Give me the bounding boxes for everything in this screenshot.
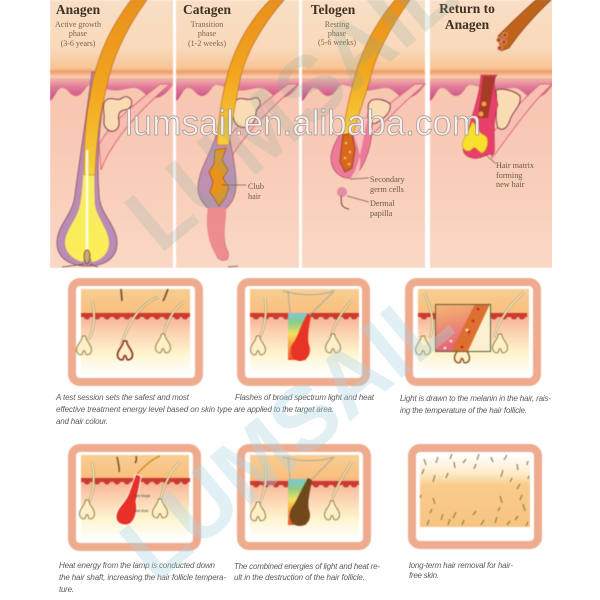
panel: Catagen bbox=[176, 0, 299, 268]
text: test session caption bbox=[55, 393, 233, 426]
icon: hair matrix bbox=[462, 122, 488, 153]
text: Catagen description: (1-2 weeks) bbox=[188, 39, 226, 48]
icon: sebaceous gland bbox=[368, 99, 390, 124]
icon: detached hair bbox=[498, 0, 551, 51]
text: test session caption: and hair colour. bbox=[56, 417, 108, 426]
icon: follicle bbox=[463, 75, 498, 158]
icon: sebaceous gland bbox=[232, 98, 260, 127]
icon: arrector muscle bbox=[99, 84, 170, 170]
text: Catagen description: Transition bbox=[191, 20, 223, 29]
icon: hair shaft bbox=[217, 0, 284, 145]
icon: arrector muscle bbox=[490, 84, 552, 158]
text: Telogen description: phase bbox=[328, 29, 347, 38]
label: dermal papilla: Dermal bbox=[370, 199, 395, 208]
icon: dermal papilla bbox=[337, 187, 347, 197]
text: test session caption: effective treatment energy level based on skin type bbox=[56, 405, 233, 414]
label: dermal papilla bbox=[370, 199, 395, 218]
icon: sebaceous gland bbox=[103, 97, 132, 131]
watermark: LUMSAIL lower: LUMSAIL bbox=[102, 268, 470, 600]
text: hair-free caption: long-term hair removal for hair- bbox=[409, 561, 513, 570]
heading: Return to Anagen bbox=[439, 1, 495, 32]
icon: follicle bbox=[331, 118, 372, 178]
label: hair bulge and hair bulb bbox=[134, 494, 150, 513]
panel: test session bbox=[72, 282, 199, 382]
text: flashes caption: Flashes of broad spectrum light and heat bbox=[235, 393, 375, 402]
text: hair-free caption bbox=[409, 561, 513, 580]
text: Catagen description: phase bbox=[198, 29, 217, 38]
label: secondary germ cells: Secondary bbox=[370, 175, 405, 184]
icon: follicle and tail bbox=[198, 135, 236, 260]
icon: arrector muscle bbox=[226, 84, 298, 160]
arrow: hair matrix leader bbox=[485, 154, 496, 164]
text: Catagen description bbox=[188, 20, 226, 48]
label: hair matrix: Hair matrix bbox=[496, 161, 534, 170]
label: hair matrix: forming bbox=[496, 171, 522, 180]
text: combined energies caption: ult in the destruction of the hair follicle. bbox=[234, 573, 365, 582]
icon: club hair bbox=[209, 148, 229, 206]
text: Telogen description: Resting bbox=[325, 20, 349, 29]
panel: Return to Anagen bbox=[430, 0, 553, 268]
heading: Return to Anagen: Return to bbox=[439, 1, 495, 16]
text: melanin caption: Light is drawn to the melanin in the hair, rais- bbox=[400, 394, 551, 403]
panel: light drawn to melanin bbox=[409, 282, 537, 382]
panel: combined energies bbox=[241, 448, 367, 546]
panel: hair-free skin bbox=[412, 448, 538, 545]
heading: Anagen: Anagen bbox=[56, 2, 101, 17]
label: secondary germ cells bbox=[370, 175, 405, 194]
text: combined energies caption bbox=[234, 562, 380, 582]
heading: Telogen: Telogen bbox=[311, 2, 356, 17]
text: Anagen description bbox=[55, 20, 101, 48]
text: heat caption bbox=[59, 561, 226, 594]
text: Anagen description: Active growth bbox=[55, 20, 101, 29]
text: Telogen description bbox=[318, 20, 356, 47]
text: melanin caption: ing the temperature of the hair follicle. bbox=[400, 406, 527, 415]
panel: broad spectrum flashes bbox=[241, 282, 366, 382]
icon: hair shaft bbox=[343, 0, 410, 135]
text: melanin caption bbox=[400, 394, 551, 415]
icon: sebaceous gland bbox=[496, 89, 520, 129]
text: test session caption: A test session sets the safest and most bbox=[55, 393, 190, 402]
label: hair bulge and hair bulb: Hair Bulge bbox=[134, 494, 150, 498]
icon: follicle sheath bbox=[57, 72, 117, 266]
text: combined energies caption: The combined energies of light and heat re- bbox=[234, 562, 380, 571]
icon: arrector muscle bbox=[372, 83, 426, 136]
heading: Return to Anagen: Anagen bbox=[445, 17, 490, 32]
label: club hair: hair bbox=[248, 192, 261, 201]
label: hair matrix: new hair bbox=[496, 180, 525, 189]
label: dermal papilla: papilla bbox=[370, 209, 393, 218]
watermark: website address: lumsail.en.alibaba.com bbox=[125, 102, 481, 143]
chart: magnified follicle square bbox=[435, 304, 490, 352]
label: club hair bbox=[248, 182, 264, 201]
icon: hair shaft bbox=[84, 0, 147, 175]
text: Telogen description: (5-6 weeks) bbox=[318, 38, 356, 47]
text: hair-free caption: free skin. bbox=[409, 571, 439, 580]
label: hair matrix bbox=[496, 161, 534, 189]
text: Anagen description: phase bbox=[69, 29, 88, 38]
panel: Telogen bbox=[302, 0, 425, 268]
text: flashes caption bbox=[234, 393, 375, 414]
icon: dermal papilla bbox=[62, 250, 98, 267]
text: heat caption: the hair shaft, increasing the hair follicle tempera- bbox=[59, 573, 226, 582]
label: secondary germ cells: germ cells bbox=[370, 185, 404, 194]
text: flashes caption: are applied to the target area. bbox=[234, 405, 334, 414]
text: Anagen description: (3-6 years) bbox=[61, 39, 96, 48]
panel: heat conducted down shaft bbox=[72, 448, 197, 547]
heading: Catagen: Catagen bbox=[183, 2, 231, 17]
panel: Anagen bbox=[50, 0, 173, 268]
text: heat caption: Heat energy from the lamp is conducted down bbox=[59, 561, 216, 570]
arrow: leaders bbox=[347, 178, 369, 202]
text: heat caption: ture. bbox=[59, 585, 74, 594]
label: club hair: Club bbox=[248, 182, 264, 191]
arrow: club hair leader bbox=[222, 184, 246, 186]
icon: club hair bbox=[340, 133, 355, 172]
label: hair bulge and hair bulb: Hair Bulb bbox=[134, 509, 148, 513]
